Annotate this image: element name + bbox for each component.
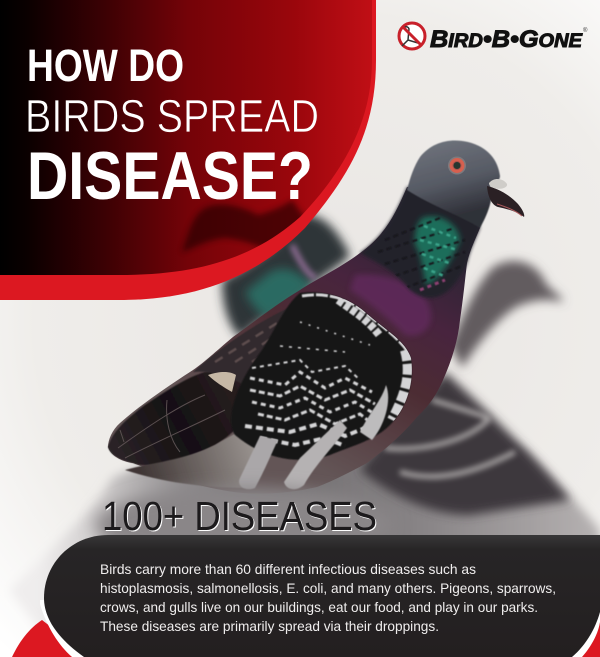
text panel (40, 535, 600, 657)
logo wordmark: BIRD•B•GONE (430, 26, 583, 53)
body copy (100, 561, 556, 634)
red corner accents (12, 620, 600, 657)
tail feather lines (118, 395, 225, 458)
heading: 100+ diseases: 100+ DISEASES (102, 493, 377, 539)
wing (231, 292, 412, 460)
cere (489, 179, 507, 189)
blurred ground and background birds (10, 215, 600, 657)
pigeon lower fade (95, 487, 395, 563)
pale tail underside (125, 425, 262, 488)
green neck sheen (415, 216, 460, 285)
pale flight feathers (239, 436, 278, 489)
pigeon (95, 141, 524, 563)
title panel: dark gradient (0, 0, 372, 275)
purple breast sheen (350, 274, 431, 336)
logo (399, 23, 588, 53)
title line 2: BIRDS SPREAD (25, 90, 319, 142)
pink foot glow (298, 515, 346, 539)
pigeon body (108, 187, 480, 494)
neck feather scales (378, 218, 465, 290)
pale tail patch (208, 372, 236, 392)
title line 1: HOW DO (27, 40, 184, 91)
red accent right (576, 620, 600, 657)
covert feather texture (215, 318, 312, 362)
wing speckled white pattern (245, 295, 408, 446)
background pigeon body (360, 372, 570, 515)
body copy: Birds carry more than 60 different infectious diseases such as (100, 561, 476, 577)
eye (448, 156, 466, 174)
body copy: These diseases are primarily spread via their droppings. (100, 618, 439, 634)
red accent left (12, 620, 90, 657)
lower grey background body (16, 444, 600, 624)
body copy: histoplasmosis, salmonellosis, E. coli, and many others. Pigeons, sparrows, (100, 580, 556, 596)
background pigeon head and neck (450, 261, 563, 368)
back bird lilac sheen (292, 245, 316, 278)
tail feathers (108, 371, 251, 465)
text panel dark shape (44, 535, 600, 657)
beak (487, 186, 524, 217)
title panel: red backing band (0, 0, 376, 300)
title (25, 40, 319, 214)
back bird neck (222, 215, 350, 338)
background pigeon wing stripes (385, 400, 515, 476)
title line 3: DISEASE? (27, 138, 313, 214)
body copy: crows, and gulls live on our buildings, eat our food, and play in our parks. (100, 599, 538, 615)
logo registered mark: ® (583, 27, 588, 34)
head (407, 141, 500, 228)
brown wing coverts (193, 304, 325, 385)
text panel white outline (40, 600, 600, 657)
beak lower red line (497, 204, 522, 216)
back bird teal sheen (245, 269, 312, 318)
logo icon: no birds sign (399, 23, 425, 49)
neck (360, 187, 480, 298)
bird silhouette through panel (182, 200, 310, 255)
